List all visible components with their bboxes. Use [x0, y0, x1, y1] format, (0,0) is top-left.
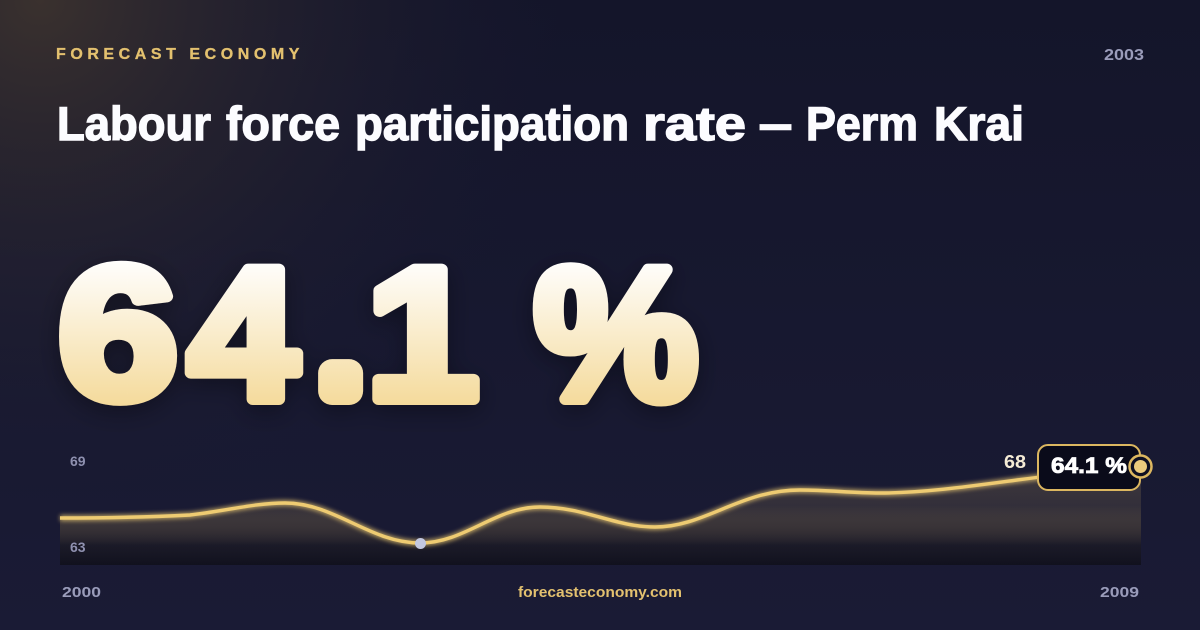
title	[57, 97, 1024, 150]
title: rate	[643, 97, 746, 150]
big value: 1	[366, 229, 479, 439]
minimum point marker	[415, 538, 426, 549]
title: participation	[355, 97, 629, 150]
sparkline chart	[60, 445, 1152, 565]
current point marker	[1130, 456, 1152, 478]
big value: 6	[58, 228, 178, 438]
series high label: 68	[1004, 452, 1026, 472]
line glow	[60, 477, 1040, 543]
big value: 4	[188, 229, 298, 439]
title: Krai	[934, 97, 1024, 150]
website: forecasteconomy.com	[518, 584, 682, 601]
current value callout	[1038, 445, 1140, 490]
current value callout: 64.1 %	[1051, 453, 1127, 478]
axis label: max: 69	[70, 453, 86, 469]
title: force	[226, 97, 340, 150]
title: —	[760, 97, 791, 150]
big value: .	[324, 283, 357, 417]
big value: %	[534, 229, 698, 439]
chart area fill	[60, 466, 1141, 565]
x axis end year: 2009	[1100, 584, 1139, 601]
axis label: min: 63	[70, 539, 86, 555]
title: Labour	[57, 97, 211, 150]
brand label: FORECAST ECONOMY	[56, 46, 304, 63]
trend line	[60, 477, 1040, 543]
big value	[58, 228, 698, 439]
year label: top right: 2003	[1104, 47, 1144, 64]
title: Perm	[806, 97, 918, 150]
x axis start year: 2000	[62, 584, 101, 601]
